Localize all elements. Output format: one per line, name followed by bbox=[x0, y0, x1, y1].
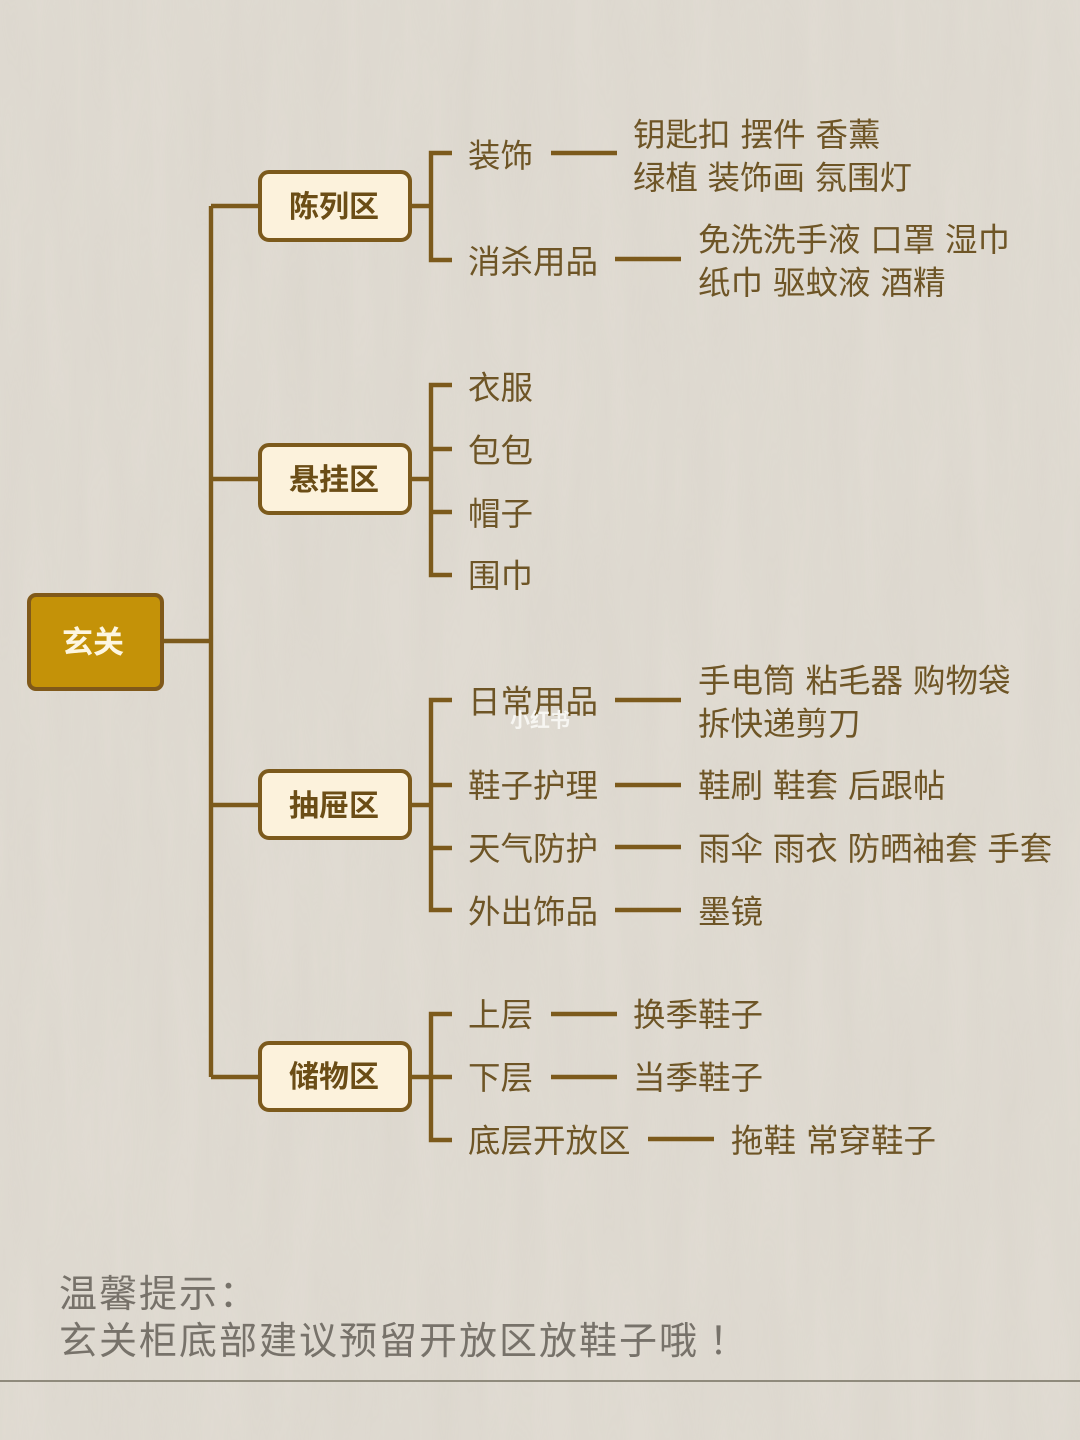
tip text bbox=[59, 1274, 749, 1363]
category box: 抽屉区 bbox=[260, 771, 410, 838]
item: 装饰: 装饰 bbox=[468, 138, 533, 174]
bracket: 抽屉区 bbox=[411, 700, 452, 910]
tip text: 玄关柜底部建议预留开放区放鞋子哦 ！ bbox=[59, 1321, 749, 1363]
item: 日常用品: 手电筒 粘毛器 购物袋 bbox=[698, 663, 1011, 699]
item: 上层 bbox=[468, 997, 763, 1033]
item: 装饰 bbox=[468, 117, 912, 196]
tip text: 温馨提示： bbox=[59, 1274, 259, 1316]
item: 装饰: 钥匙扣 摆件 香薰 bbox=[633, 117, 881, 153]
item: 下层: 当季鞋子 bbox=[633, 1060, 763, 1096]
item: 下层 bbox=[468, 1060, 763, 1096]
panel: 储物区 branch bbox=[260, 997, 936, 1159]
items: 悬挂区: 围巾 bbox=[468, 558, 533, 594]
category box: 陈列区: 陈列区 bbox=[289, 191, 379, 224]
item: 消杀用品: 纸巾 驱蚊液 酒精 bbox=[698, 265, 946, 301]
item: 底层开放区: 底层开放区 bbox=[468, 1123, 631, 1159]
item: 鞋子护理 bbox=[468, 768, 946, 804]
bracket: 悬挂区 bbox=[411, 385, 452, 575]
bracket: 陈列区 bbox=[411, 153, 452, 260]
item: 日常用品: 日常用品 bbox=[468, 684, 598, 720]
category box: 储物区 bbox=[260, 1043, 410, 1110]
item: 天气防护 bbox=[468, 831, 1052, 867]
item: 底层开放区: 拖鞋 常穿鞋子 bbox=[731, 1123, 936, 1159]
item: 上层: 上层 bbox=[468, 997, 533, 1033]
item: 日常用品 bbox=[468, 663, 1011, 742]
item: 消杀用品 bbox=[468, 222, 1010, 301]
watermark: 小红书 bbox=[510, 709, 570, 732]
item: 装饰: 绿植 装饰画 氛围灯 bbox=[633, 160, 912, 196]
item: 天气防护: 天气防护 bbox=[468, 831, 598, 867]
category box: 悬挂区 bbox=[260, 445, 410, 513]
items: 悬挂区: 包包 bbox=[468, 433, 533, 469]
panel: 抽屉区 branch bbox=[260, 663, 1052, 930]
category box: 陈列区 bbox=[260, 172, 410, 240]
root node: 玄关: 玄关 bbox=[62, 625, 124, 660]
item: 底层开放区 bbox=[468, 1123, 936, 1159]
items: 悬挂区: 帽子 bbox=[468, 496, 533, 532]
main trunk connector bbox=[163, 206, 259, 1077]
item: 外出饰品: 墨镜 bbox=[698, 894, 763, 930]
item: 日常用品: 拆快递剪刀 bbox=[698, 706, 861, 742]
root node: 玄关 bbox=[29, 595, 162, 689]
items: 悬挂区: 衣服 bbox=[468, 370, 533, 406]
item: 外出饰品: 外出饰品 bbox=[468, 894, 598, 930]
panel: 悬挂区 branch bbox=[260, 370, 533, 594]
panel: 陈列区 branch bbox=[260, 117, 1010, 301]
items: 悬挂区 bbox=[468, 370, 533, 594]
item: 天气防护: 雨伞 雨衣 防晒袖套 手套 bbox=[698, 831, 1052, 867]
item: 外出饰品 bbox=[468, 894, 763, 930]
bracket: 储物区 bbox=[411, 1014, 452, 1140]
item: 鞋子护理: 鞋刷 鞋套 后跟帖 bbox=[698, 768, 946, 804]
category box: 抽屉区: 抽屉区 bbox=[289, 790, 379, 823]
item: 上层: 换季鞋子 bbox=[633, 997, 763, 1033]
category box: 悬挂区: 悬挂区 bbox=[289, 464, 379, 497]
item: 鞋子护理: 鞋子护理 bbox=[468, 768, 598, 804]
item: 消杀用品: 消杀用品 bbox=[468, 244, 598, 280]
category box: 储物区: 储物区 bbox=[289, 1061, 379, 1094]
item: 下层: 下层 bbox=[468, 1060, 533, 1096]
item: 消杀用品: 免洗洗手液 口罩 湿巾 bbox=[698, 222, 1010, 258]
